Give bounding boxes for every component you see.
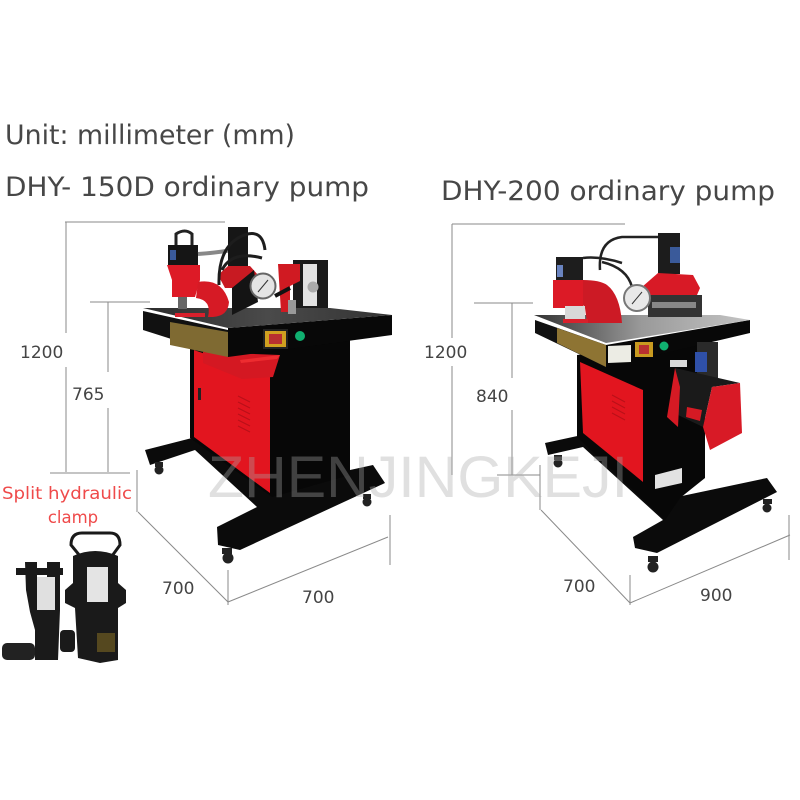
gold plate: [557, 328, 606, 367]
dimension lines: left machine: [50, 222, 390, 605]
base feet: [145, 438, 385, 550]
warning sign: [655, 468, 682, 489]
punch tool: [167, 231, 232, 317]
red cutting head: [642, 273, 700, 295]
heading: DHY-150D: DHY- 150D ordinary pump: [5, 172, 369, 203]
table top: [534, 315, 750, 343]
unit heading: Unit: millimeter (mm): [5, 120, 295, 151]
switch: [263, 329, 288, 349]
table top: [143, 308, 392, 328]
dimension lines: right machine: [452, 224, 790, 605]
switch: [635, 342, 653, 357]
heading: DHY-200: DHY-200 ordinary pump: [441, 176, 775, 207]
table left skirt: [535, 320, 606, 367]
dimension labels: 700: [563, 577, 595, 597]
middle cylinder and hoses: [218, 227, 265, 315]
cutter block: [648, 295, 702, 317]
hydraulic hoses: [583, 237, 658, 287]
base feet: [545, 435, 777, 553]
icon: crimp head right: [60, 533, 126, 663]
green lamp: [660, 342, 668, 350]
icon: crimp head left: [2, 562, 63, 660]
split hydraulic clamp label: [2, 484, 132, 527]
table right face: [228, 315, 392, 357]
red door: [580, 362, 643, 482]
left punch tool: [553, 257, 622, 323]
warning label: [608, 345, 631, 363]
cylinder label: [670, 247, 680, 263]
gold plate: [170, 322, 228, 357]
dimension labels: 700: [162, 579, 194, 599]
green lamp: [295, 331, 305, 341]
dimension labels: 1200: [20, 343, 63, 363]
red drawer: [203, 352, 280, 379]
white gap: [670, 360, 687, 367]
table left skirt: [143, 311, 228, 357]
red door: [194, 350, 270, 493]
dimension labels: 700: [302, 588, 334, 608]
dimension labels: 900: [700, 586, 732, 606]
door vents and latch: [238, 396, 250, 432]
body column: [190, 340, 350, 497]
pressure gauge: [624, 285, 650, 311]
top cylinder: [658, 233, 680, 274]
dimension labels: [20, 343, 732, 608]
pressure gauge: [250, 274, 276, 298]
split hydraulic clamp label: Split hydraulic: [2, 484, 132, 503]
body column: [577, 340, 705, 520]
dimension labels: 1200: [424, 343, 467, 363]
watermark: ZHENJINGKEJI: [208, 445, 628, 510]
split hydraulic clamp label: clamp: [48, 508, 98, 527]
dimension labels: 765: [72, 385, 104, 405]
casters: [554, 455, 772, 572]
right tool: [275, 260, 328, 314]
casters: [154, 462, 372, 564]
machine: DHY-150D: [143, 227, 392, 564]
machine: DHY-200: [534, 233, 777, 572]
door vents: [612, 395, 625, 420]
table right face: [606, 320, 750, 367]
side cutter unit: [667, 342, 742, 450]
dimension labels: 840: [476, 387, 508, 407]
